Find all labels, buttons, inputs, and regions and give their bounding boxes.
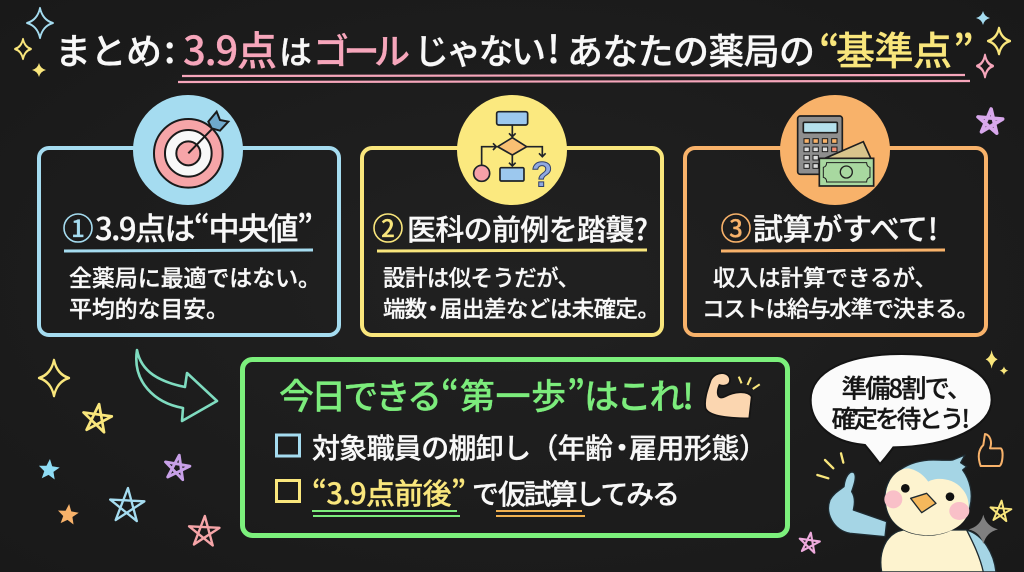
title: 基準点 bbox=[836, 21, 952, 77]
speech bubble: 確定を待とう! bbox=[832, 399, 970, 435]
card 2 body bbox=[383, 261, 660, 324]
card 2 heading: 医科の前例を踏襲? bbox=[407, 207, 648, 249]
icon: flowchart: ? bbox=[531, 156, 553, 195]
emphasis underlines bbox=[312, 511, 585, 516]
icon: calculator and money bbox=[780, 95, 890, 205]
first step heading bbox=[279, 369, 694, 420]
checklist item 1: 雇用形態） bbox=[629, 427, 767, 467]
sparkles: top right bbox=[976, 11, 1010, 134]
checklist item 2 bbox=[276, 471, 680, 513]
title: は bbox=[279, 26, 312, 74]
title: ゴール bbox=[313, 23, 410, 75]
title bbox=[55, 18, 974, 77]
card 2 body: 届出差などは未確定。 bbox=[440, 292, 660, 324]
sparkles: top left bbox=[15, 8, 53, 77]
speech bubble bbox=[811, 354, 992, 464]
title: 3.9点 bbox=[183, 19, 277, 77]
card 2 heading: 2 bbox=[381, 209, 395, 244]
thumb sparks bbox=[817, 453, 843, 478]
icon: flexed arm bbox=[705, 373, 760, 418]
panel: card 1 median bbox=[39, 95, 339, 335]
title: まとめ bbox=[55, 23, 162, 75]
card 1 body bbox=[69, 259, 321, 324]
card 3 heading: 試算がすべて! bbox=[753, 205, 938, 249]
speech bubble: 準備8割で、 bbox=[842, 369, 972, 405]
first step heading: 今日できる bbox=[279, 369, 442, 420]
title: ” bbox=[953, 18, 974, 76]
checklist item 1: ・ bbox=[608, 427, 636, 467]
checklist item 2: 仮試算してみる bbox=[498, 473, 680, 513]
title double underline bbox=[178, 75, 970, 82]
card 3 body bbox=[702, 261, 979, 324]
title: あなたの薬局の bbox=[567, 23, 815, 75]
checklist item 1: 対象職員の棚卸し（年齢 bbox=[312, 427, 613, 467]
panel: card 3 calculation bbox=[685, 95, 986, 335]
decorative sparkles near mascot bbox=[798, 350, 1012, 553]
card 2 body: 設計は似そうだが、 bbox=[383, 261, 580, 293]
card 2 body: 端数 bbox=[383, 292, 427, 324]
checklist item 1 bbox=[276, 427, 767, 467]
title: “ bbox=[819, 18, 840, 76]
title: ! bbox=[547, 19, 560, 74]
card 1 body: 平均的な目安。 bbox=[69, 290, 229, 324]
card 1 heading: 3.9点は“中央値” bbox=[95, 204, 313, 249]
panel: first step bbox=[242, 360, 788, 536]
mascot group bbox=[798, 350, 1012, 572]
icon: thumbs up outline bbox=[979, 434, 1003, 466]
card 3 body: 収入は計算できるが、 bbox=[713, 261, 937, 293]
checklist item 2: “3.9点前後” bbox=[312, 471, 466, 513]
card 3 body: コストは給与水準で決まる。 bbox=[702, 292, 979, 324]
icon: target bbox=[133, 95, 243, 205]
panel: card 2 precedent bbox=[362, 95, 662, 335]
first step heading: “第一歩” bbox=[441, 369, 585, 420]
checklist item 2: で bbox=[472, 473, 499, 512]
icon: flowchart bbox=[457, 95, 567, 205]
card 1 heading: 1 bbox=[71, 209, 85, 244]
arrow bbox=[136, 350, 217, 421]
card 2 body: ・ bbox=[422, 292, 444, 324]
decorative stars: left bbox=[38, 360, 220, 546]
title: : bbox=[164, 19, 175, 74]
card 1 body: 全薬局に最適ではない。 bbox=[69, 259, 321, 293]
card 3 heading: 3 bbox=[729, 209, 743, 244]
penguin mascot bbox=[829, 455, 996, 572]
first step heading: はこれ! bbox=[584, 369, 694, 420]
title: じゃない bbox=[414, 24, 546, 75]
